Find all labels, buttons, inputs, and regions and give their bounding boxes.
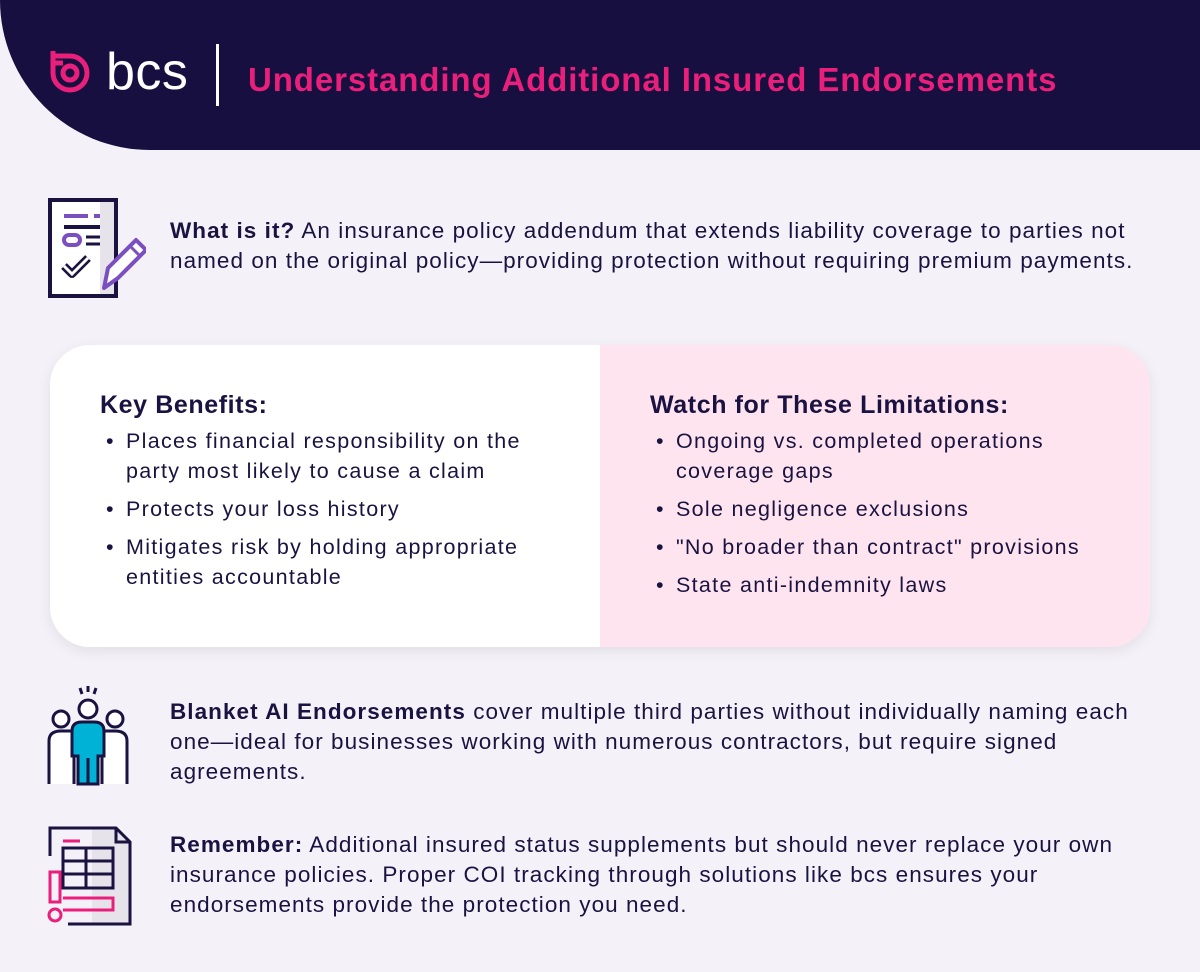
text: blanket [170,699,1129,784]
panel: limitations: coverage gaps [676,459,834,483]
icon: document alert [48,826,132,926]
panel: key benefits [50,345,600,647]
text: blanket: one—ideal for businesses working with numerous contractors, but require signed [170,729,1057,754]
panel: key benefits: Mitigates risk by holding appropriate [126,535,518,559]
text: what is it: named on the original policy—providing protection without requiring premium payments. [170,248,1133,273]
panel: key benefits: Protects your loss history [126,497,400,521]
panel: limitations: Watch for These Limitations: [650,391,1009,419]
logo [50,43,188,101]
panel: limitations: Sole negligence exclusions [676,497,969,521]
text: blanket: Blanket AI Endorsements cover multiple third parties without individually naming each [170,699,1129,724]
panel: limitations: Ongoing vs. completed operations [676,429,1044,453]
panel: key benefits: party most likely to cause a claim [126,459,486,483]
text: what is it: What is it? An insurance policy addendum that extends liability coverage to parties not [170,218,1126,243]
text: remember [170,832,1113,917]
logo: bcs [106,43,188,101]
card: benefits and limitations [50,345,1150,647]
text: remember: Remember: Additional insured status supplements but should never replace your own [170,832,1113,857]
icon: document with pen [48,198,146,298]
panel: key benefits: entities accountable [126,565,342,589]
title: Understanding Additional Insured Endorsements [248,61,1057,98]
text: what is it [170,218,1133,273]
panel: key benefits: Key Benefits: [100,391,268,419]
panel: key benefits: Places financial responsibility on the [126,429,521,453]
text: remember: insurance policies. Proper COI tracking through solutions like bcs ensures your [170,862,1038,887]
panel: limitations [600,345,1150,647]
icon: people [48,686,128,786]
text: remember: endorsements provide the protection you need. [170,892,688,917]
text: blanket: agreements. [170,759,307,784]
panel: limitations: "No broader than contract" provisions [676,535,1080,559]
header [0,0,1200,150]
panel: limitations: State anti-indemnity laws [676,573,948,597]
